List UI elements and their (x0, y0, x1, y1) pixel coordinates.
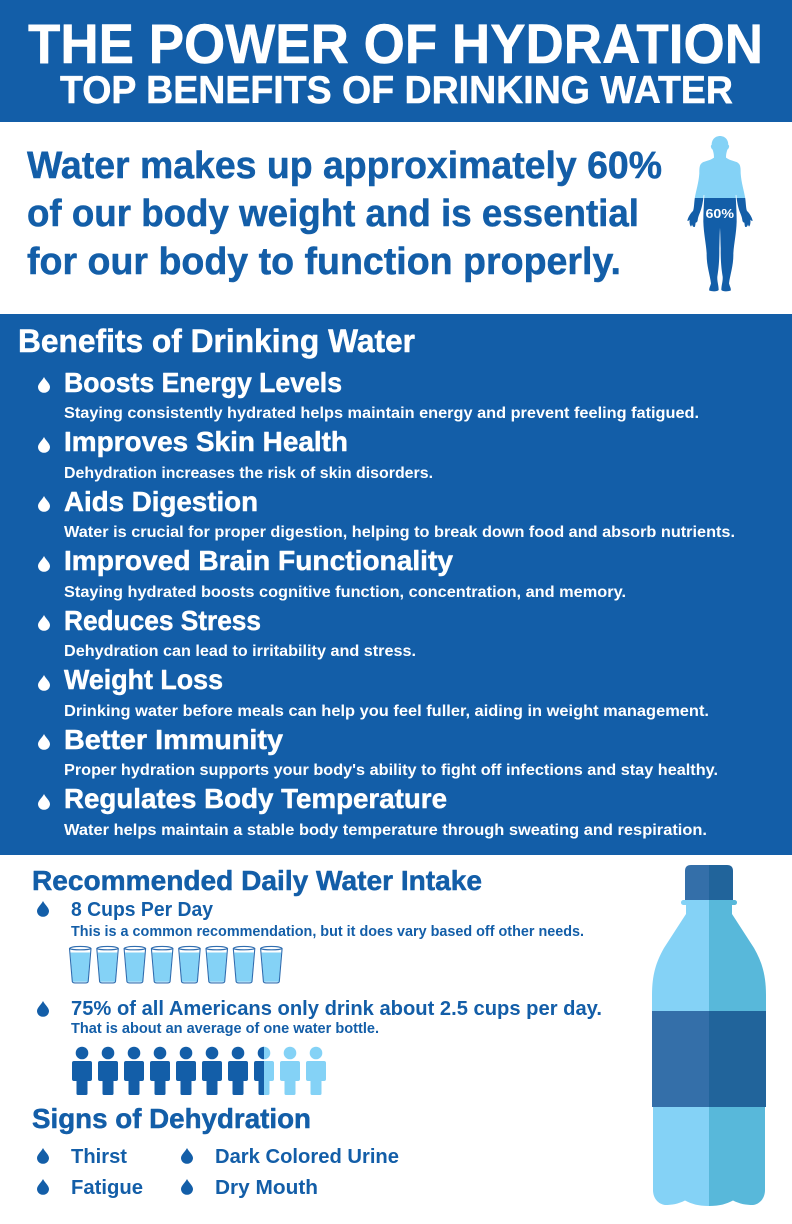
benefit: weight loss: Weight Loss (64, 664, 223, 695)
icon: human body 60% water (687, 136, 753, 291)
benefit: brain: Staying hydrated boosts cognitive function, concentration, and memory. (64, 584, 626, 601)
benefit: stress: Reduces Stress (64, 605, 261, 636)
item: 75% of Americans: 75% of all Americans only drink about 2.5 cups per day. (71, 997, 602, 1020)
heading: signs of dehydration: Signs of Dehydration (32, 1103, 311, 1134)
benefit: stress: Dehydration can lead to irritability and stress. (64, 643, 416, 660)
intro statement: of our body weight and is essential (27, 193, 639, 235)
benefit: temperature: Water helps maintain a stable body temperature through sweating and respiration. (64, 822, 707, 839)
benefit: immunity: Better Immunity (64, 724, 283, 755)
panel: benefits of drinking water (0, 314, 792, 855)
heading: recommended daily water intake: Recommended Daily Water Intake (32, 865, 482, 896)
header banner (0, 0, 792, 122)
icon: water bottle (652, 865, 766, 1206)
title: THE POWER OF HYDRATION (28, 12, 763, 75)
intro statement: Water makes up approximately 60% (27, 145, 662, 187)
benefit: immunity: Proper hydration supports your body's ability to fight off infections and stay healthy. (64, 762, 718, 779)
benefit: skin: Dehydration increases the risk of skin disorders. (64, 465, 433, 482)
item: 8 cups per day: This is a common recommendation, but it does vary based off other needs. (71, 923, 584, 940)
benefit: brain (38, 545, 626, 601)
icon: ten people, 75 percent shaded (72, 1047, 326, 1095)
list: signs of dehydration: Thirst (71, 1145, 127, 1168)
list: signs of dehydration: Dark Colored Urine (215, 1145, 399, 1168)
benefit: skin: Improves Skin Health (64, 426, 348, 457)
icon: row of eight glasses (70, 946, 282, 983)
list: signs of dehydration: Fatigue (71, 1176, 143, 1199)
benefit: skin (38, 426, 433, 482)
benefits heading: Benefits of Drinking Water (18, 323, 415, 359)
list: signs of dehydration (37, 1145, 399, 1199)
item: 75% of Americans (37, 997, 602, 1037)
benefit: digestion (38, 486, 735, 541)
benefit: weight loss: Drinking water before meals can help you feel fuller, aiding in weight management. (64, 703, 709, 720)
item: 8 cups per day: 8 Cups Per Day (71, 899, 214, 921)
benefit: energy: Staying consistently hydrated helps maintain energy and prevent feeling fatigued. (64, 405, 699, 422)
benefit: stress (38, 605, 416, 660)
benefit: immunity (38, 724, 718, 779)
item: 8 cups per day (37, 899, 584, 940)
benefit: temperature: Regulates Body Temperature (64, 783, 447, 814)
benefit: temperature (38, 783, 707, 839)
benefit: energy (38, 367, 699, 422)
benefit: weight loss (38, 664, 709, 720)
benefit: energy: Boosts Energy Levels (64, 367, 342, 398)
subtitle: TOP BENEFITS OF DRINKING WATER (60, 69, 733, 112)
benefit: brain: Improved Brain Functionality (64, 545, 453, 576)
intro statement (27, 145, 662, 283)
icon: human body 60% water: 60% (706, 207, 734, 221)
benefit: digestion: Water is crucial for proper digestion, helping to break down food and absorb nutrients. (64, 524, 735, 541)
benefit: digestion: Aids Digestion (64, 486, 258, 517)
list: signs of dehydration: Dry Mouth (215, 1176, 318, 1199)
item: 75% of Americans: That is about an average of one water bottle. (71, 1020, 379, 1037)
intro statement: for our body to function properly. (27, 241, 621, 283)
